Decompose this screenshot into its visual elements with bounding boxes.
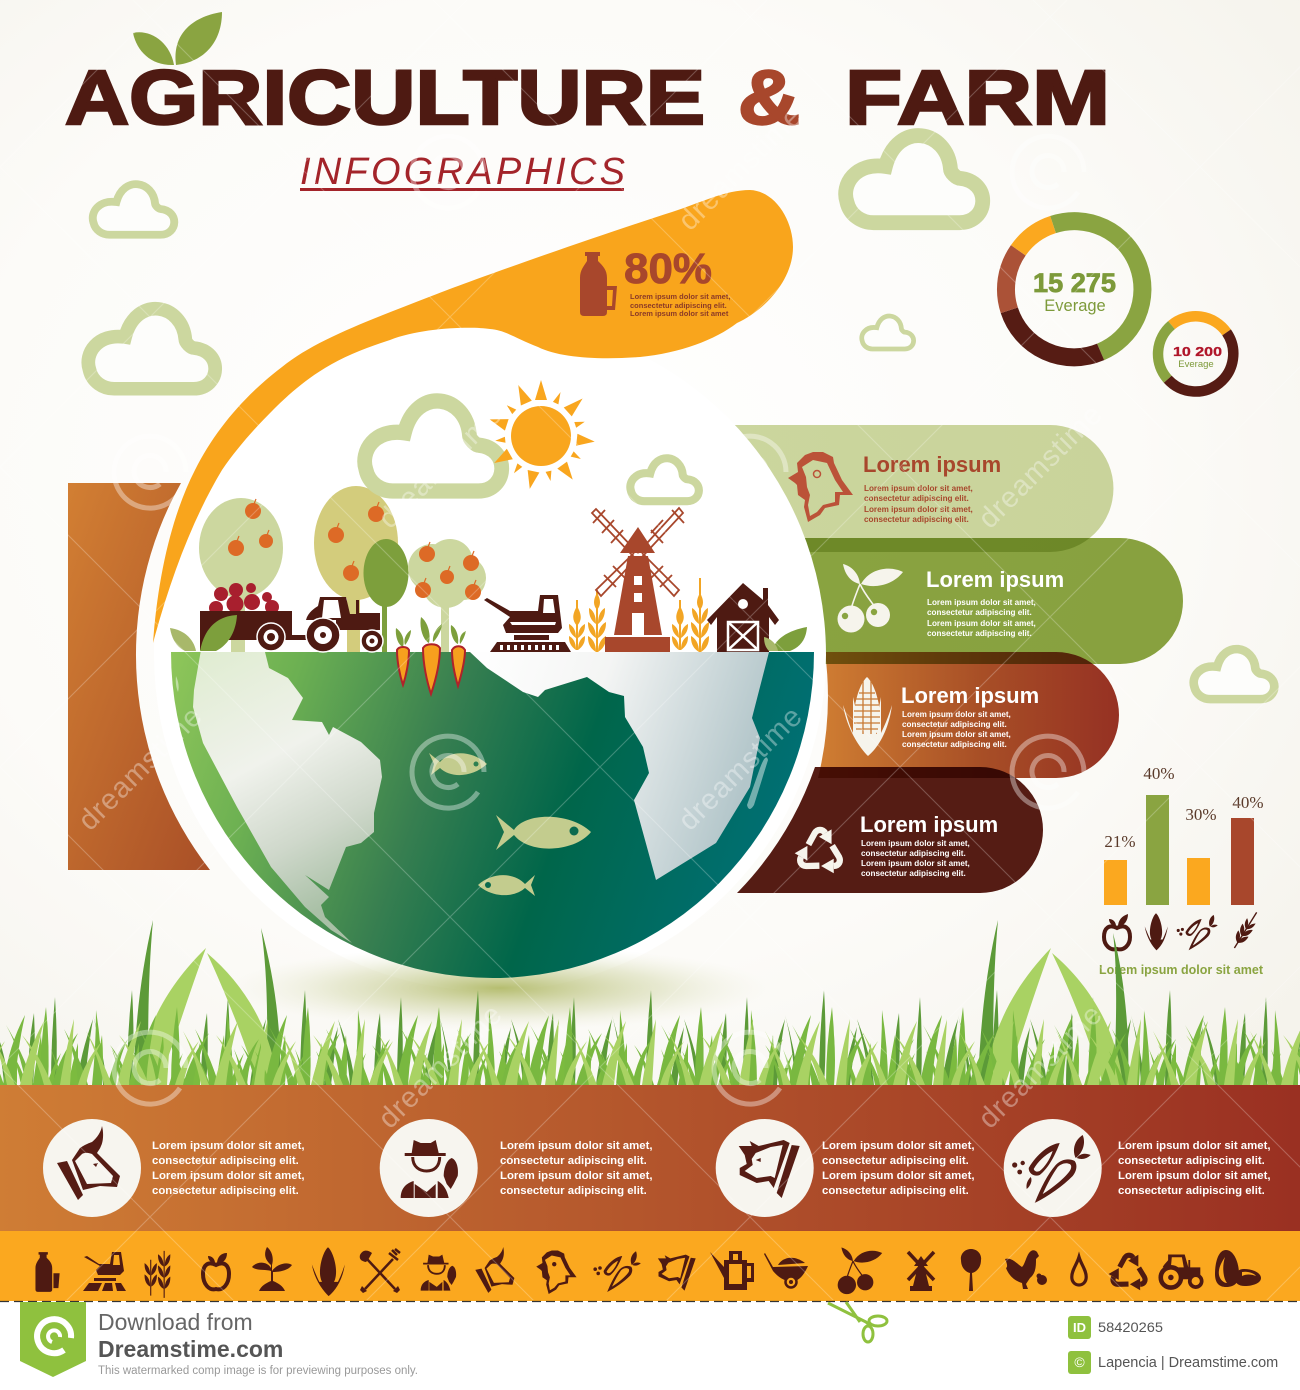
icon: tractor <box>1161 1254 1202 1288</box>
icon: bottle with glass <box>35 1252 60 1292</box>
icon: cherries <box>838 564 903 632</box>
stat: 80 percent: 80% <box>624 245 712 293</box>
panel: left brown shape <box>68 483 210 870</box>
icon: vegetables <box>1012 1135 1091 1203</box>
chart: donut 10 200: 10 200 <box>1173 344 1222 359</box>
icon: tree <box>961 1249 981 1291</box>
icon: tractor <box>306 597 383 652</box>
icon: recycle <box>795 829 845 873</box>
continent: right <box>470 652 769 880</box>
panel: orange swoosh callout: consectetur adipiscing elit. <box>630 301 727 310</box>
panel: corn banner: Lorem ipsum dolor sit amet, <box>902 710 1011 719</box>
subtitle: INFOGRAPHICS <box>300 151 625 193</box>
panel: icon strip <box>0 1231 1300 1301</box>
chart: donut 15 275: Everage <box>1044 297 1106 315</box>
icon: small cloud right <box>862 316 914 349</box>
item: pig: consectetur adipiscing elit. <box>822 1155 969 1167</box>
footer credit: © <box>1074 1354 1085 1370</box>
icon: sun <box>488 380 595 490</box>
panel: corn banner: consectetur adipiscing elit. <box>902 720 1007 729</box>
panel: orange swoosh callout <box>153 190 793 643</box>
panel: recycle banner: consectetur adipiscing elit. <box>861 869 966 878</box>
chart: bar chart: 30% <box>1185 805 1217 824</box>
panel: bottom info band <box>0 1085 1300 1231</box>
icon: scissors <box>828 1302 887 1342</box>
title <box>65 55 1110 141</box>
watermark text <box>72 100 1109 1135</box>
chart: bar chart: 40% <box>1143 764 1175 783</box>
item: vegetables: consectetur adipiscing elit. <box>1118 1185 1265 1197</box>
icon: chicken <box>536 1251 577 1294</box>
panel: corn banner: Lorem ipsum <box>901 683 1039 708</box>
watermark text: dreamstime <box>972 998 1109 1135</box>
chart: donut 15 275: 15 275 <box>1033 268 1116 298</box>
icon: corn <box>312 1247 345 1296</box>
continent: left <box>193 652 382 943</box>
footer id <box>1068 1316 1163 1339</box>
highlight streaks <box>176 676 768 809</box>
item: pig: Lorem ipsum dolor sit amet, <box>822 1140 975 1152</box>
icon: fish lower <box>478 875 535 896</box>
icon: carrots <box>396 617 466 694</box>
title: FARM <box>845 55 1110 141</box>
item: pig: Lorem ipsum dolor sit amet, <box>822 1170 975 1182</box>
item: farmer <box>380 1119 653 1217</box>
panel: orange swoosh callout: Lorem ipsum dolor sit amet, <box>630 292 730 301</box>
icon: carrots <box>593 1251 641 1292</box>
icon: cherries <box>838 1248 882 1294</box>
panel: corn banner: Lorem ipsum dolor sit amet, <box>902 730 1011 739</box>
icon: apple tree 1 <box>199 498 283 652</box>
watermark text: dreamstime <box>372 998 509 1135</box>
icon: pig <box>658 1255 696 1291</box>
icon: pig <box>739 1140 800 1198</box>
panel: cherry banner: Lorem ipsum dolor sit amet, <box>927 598 1036 607</box>
footer text: Download from <box>98 1309 253 1335</box>
footer credit: Lapencia | Dreamstime.com <box>1098 1355 1278 1371</box>
item: cow <box>43 1119 305 1217</box>
watermark text: dreamstime <box>672 700 809 837</box>
icon: combine <box>83 1252 126 1291</box>
item: vegetables: Lorem ipsum dolor sit amet, <box>1118 1140 1271 1152</box>
icon: apple tree 2 <box>314 486 398 652</box>
icon: chicken <box>788 452 853 522</box>
chart: donut 10 200: Everage <box>1178 359 1214 370</box>
title: AGRICULTURE <box>65 55 705 141</box>
panel: cherry banner <box>800 538 1183 664</box>
icon: windmill <box>908 1252 934 1291</box>
icon: sprout <box>252 1247 292 1291</box>
icon: cloud large top right <box>846 136 983 223</box>
icon: corn <box>843 677 892 756</box>
watermark text: dreamstime <box>72 700 209 837</box>
chart: bar chart <box>1099 764 1264 977</box>
item: pig <box>716 1119 975 1217</box>
icon: watering can <box>710 1251 754 1290</box>
icon: combine harvester <box>484 595 571 652</box>
icon: fish upper <box>429 753 487 775</box>
icon: wheelbarrow <box>764 1253 808 1288</box>
panel: chicken banner: Lorem ipsum <box>863 452 1001 477</box>
panel: chicken banner: consectetur adipiscing elit. <box>864 494 969 503</box>
panel: recycle banner: Lorem ipsum <box>860 812 998 837</box>
icon: leaves right <box>764 627 807 651</box>
icon: cloud far right <box>1194 649 1274 699</box>
icon: eggs <box>1215 1250 1261 1287</box>
icon: title leaves <box>133 12 222 65</box>
icon: cloud large left <box>88 309 215 389</box>
icon: leaves left <box>170 628 196 651</box>
item: vegetables <box>1004 1119 1271 1217</box>
footer id: 58420265 <box>1098 1319 1163 1335</box>
icon: cloud behind sun <box>365 401 502 491</box>
farm scene <box>170 486 807 694</box>
icon: chart corn <box>1145 913 1168 950</box>
icon: puffy tree <box>408 539 486 652</box>
icon: trailer with apples <box>200 583 308 651</box>
panel: chicken banner: Lorem ipsum dolor sit amet, <box>864 505 973 514</box>
icon: dark tree <box>364 539 408 652</box>
grass <box>0 920 1300 1085</box>
icon: barn <box>707 583 779 652</box>
icon: wheat stalks <box>569 578 709 652</box>
icon: farmer <box>401 1140 458 1198</box>
title: & <box>738 55 800 141</box>
footer <box>0 1301 1300 1390</box>
item: farmer: Lorem ipsum dolor sit amet, <box>500 1170 653 1182</box>
icon: cow head <box>57 1126 120 1200</box>
icon: recycle <box>1108 1255 1149 1290</box>
shadow under globe <box>230 946 770 1030</box>
icon: windmill <box>592 508 684 652</box>
icon: farmer <box>421 1255 456 1291</box>
icon: wheat <box>145 1251 170 1298</box>
item: cow: consectetur adipiscing elit. <box>152 1185 299 1197</box>
watermark swirls <box>114 136 1084 1104</box>
item: cow: consectetur adipiscing elit. <box>152 1155 299 1167</box>
item: farmer: consectetur adipiscing elit. <box>500 1155 647 1167</box>
panel: corn banner: consectetur adipiscing elit. <box>902 740 1007 749</box>
item: cow: Lorem ipsum dolor sit amet, <box>152 1170 305 1182</box>
chart: donut 15 275 <box>1006 221 1142 357</box>
chart: bar chart: 40% <box>1232 793 1264 812</box>
icon: milk bottle <box>580 252 617 316</box>
panel: recycle banner: Lorem ipsum dolor sit amet, <box>861 839 970 848</box>
watermark text: dreamstime <box>372 398 509 535</box>
footer text: This watermarked comp image is for previewing purposes only. <box>98 1365 418 1377</box>
panel: cherry banner: Lorem ipsum dolor sit amet, <box>927 619 1036 628</box>
icon: cow <box>475 1247 514 1293</box>
chart: bar chart: 21% <box>1104 832 1136 851</box>
footer text: Dreamstime.com <box>98 1336 283 1362</box>
item: cow: Lorem ipsum dolor sit amet, <box>152 1140 305 1152</box>
chart: donut 10 200 <box>1158 316 1233 392</box>
panel: corn banner <box>818 652 1119 778</box>
item: farmer: consectetur adipiscing elit. <box>500 1185 647 1197</box>
panel: cherry banner: consectetur adipiscing elit. <box>927 629 1032 638</box>
panel: recycle banner: consectetur adipiscing elit. <box>861 849 966 858</box>
icon: tools <box>360 1249 400 1293</box>
watermark text: dreamstime <box>972 398 1109 535</box>
item: vegetables: Lorem ipsum dolor sit amet, <box>1118 1170 1271 1182</box>
icon: cloud top left <box>93 184 174 235</box>
icon: apple <box>203 1253 229 1289</box>
icon: dreamstime ribbon <box>20 1302 86 1377</box>
icon: fish middle <box>496 815 591 850</box>
item: pig: consectetur adipiscing elit. <box>822 1185 969 1197</box>
panel: chicken banner: consectetur adipiscing elit. <box>864 515 969 524</box>
white circle behind globe <box>154 319 826 991</box>
item: farmer: Lorem ipsum dolor sit amet, <box>500 1140 653 1152</box>
panel: recycle banner: Lorem ipsum dolor sit amet, <box>861 859 970 868</box>
background <box>0 0 1300 1085</box>
icon: chart carrots <box>1177 915 1218 950</box>
icon: chart apple <box>1104 914 1130 949</box>
footer credit <box>1068 1351 1278 1374</box>
panel: orange swoosh callout: Lorem ipsum dolor sit amet <box>630 309 729 318</box>
footer id: ID <box>1073 1320 1086 1335</box>
icon: rooster with chick <box>1005 1250 1047 1289</box>
watermark text: dreamstime <box>672 100 809 237</box>
item: vegetables: consectetur adipiscing elit. <box>1118 1155 1265 1167</box>
icon: small cloud in globe <box>630 458 699 501</box>
panel: chicken banner: Lorem ipsum dolor sit amet, <box>864 484 973 493</box>
icon: drop <box>1072 1257 1086 1285</box>
chart caption: Lorem ipsum dolor sit amet <box>1099 962 1264 977</box>
panel: chicken banner <box>733 425 1113 552</box>
panel: recycle banner <box>737 767 1043 893</box>
globe <box>171 652 814 978</box>
panel: cherry banner: Lorem ipsum <box>926 567 1064 592</box>
footer text <box>98 1309 418 1377</box>
panel: cherry banner: consectetur adipiscing elit. <box>927 608 1032 617</box>
icon: chart wheat <box>1229 909 1262 951</box>
